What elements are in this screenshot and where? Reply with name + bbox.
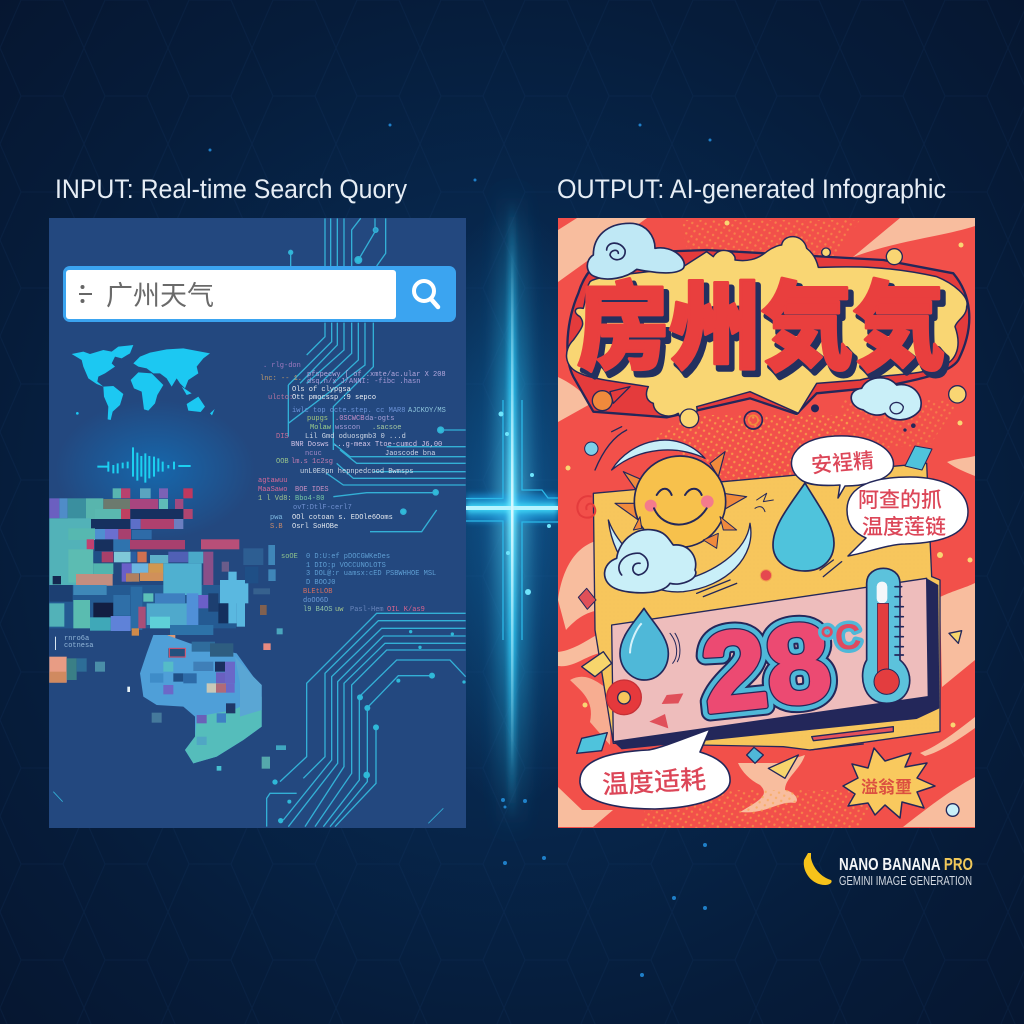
data code text: . rlg-don [263, 362, 301, 370]
speech bubble: top: 安裎精 [810, 449, 875, 478]
large water drop [773, 483, 834, 571]
data code text: .0SCWCB [335, 415, 364, 423]
south pixel landmass [140, 635, 262, 763]
circuit traces lower [53, 613, 466, 827]
speech bubble: main: 阿查的抓 [858, 489, 942, 512]
data code text: agtawuu [258, 477, 287, 485]
data code text: .sacsoe [372, 424, 401, 432]
data code text: S.B [270, 523, 283, 531]
poster sparkles and dots [566, 220, 972, 728]
data code text: soOE [281, 553, 298, 561]
data code text: pwa [270, 514, 283, 522]
heading: input: INPUT: Real-time Search Quory [55, 174, 407, 204]
data code text [64, 362, 446, 650]
blue confetti [905, 446, 932, 470]
data code text: iwlc top octe.step. cc MAR8 [292, 407, 405, 415]
data code text: 0 D:U:ef pDOCGWKeDes [306, 553, 390, 561]
data code text: OOB [276, 458, 289, 466]
speech bubble: top [791, 436, 893, 498]
temperature value: °C [819, 615, 863, 660]
circuit traces upper [288, 218, 466, 532]
icon: magnifier [414, 281, 438, 307]
temperature value: 28 [696, 599, 836, 736]
data code text: pupgs [307, 415, 328, 423]
data code text: ovT:DtlF-cerl7 [293, 504, 352, 512]
panel: input search data [49, 218, 466, 828]
logo subtitle: GEMINI IMAGE GENERATION [839, 874, 972, 888]
sun character [577, 427, 773, 547]
search menu icon [79, 285, 92, 303]
data code text: D BOOJ0 [306, 579, 335, 587]
data code text: BLEtLOB [303, 588, 332, 596]
logo title: NANO BANANA PRO [839, 854, 973, 874]
title text: 房州気気 [577, 275, 945, 382]
temperature value: 28 [696, 599, 836, 736]
data code text: OIL K/as9 [387, 606, 425, 614]
speech bubble: main: 温度莲链 [862, 516, 946, 539]
data code text: rnro6a [64, 635, 89, 643]
data code text: Pasl-Hem [350, 606, 384, 614]
temperature value: 28 [696, 599, 836, 736]
data code text: da-ogts [365, 415, 394, 423]
small water drop [577, 588, 962, 816]
data code text: MaaSawo [258, 486, 287, 494]
data code text: uw [335, 606, 344, 614]
logo: nano banana pro [804, 853, 973, 888]
data code text: DIS [276, 433, 289, 441]
speech bubble: bottom: 温度适耗 [601, 764, 707, 800]
data code text: l9 B4OS [303, 606, 332, 614]
data code text: BOE IDES [295, 486, 329, 494]
data code text: doOO6D [303, 597, 328, 605]
heading: output: OUTPUT: AI-generated Infographic [557, 174, 946, 204]
data code text: wsscon [335, 424, 360, 432]
data code text: BNR Dosws ...g-meax Ttoe-cumcd J6,00 [291, 441, 442, 449]
data code text: cotnesa [64, 642, 93, 650]
data code text: Ols of clypgsa [292, 386, 351, 394]
data code text: Molaw [310, 424, 332, 432]
pixelated glitch map mosaic [49, 488, 286, 771]
clouds near title [587, 223, 921, 420]
data code text: pfspecwy [ of .xmte/ac.ular X 208 [307, 371, 446, 379]
data code text: 3 DOL@:r uamsx:cED PSBWHHOE MSL [306, 570, 436, 578]
data code text: Ott pmocssp :9 sepco [292, 394, 376, 402]
moon and cloud [605, 517, 842, 597]
speech bubble: main [847, 477, 968, 556]
world map [72, 345, 215, 420]
data code text: Bbo4-80 [295, 495, 324, 503]
search query text: 广州天气 [106, 281, 214, 311]
icon: banana [804, 853, 832, 885]
temperature value: 28 [696, 599, 836, 736]
data code text: 1 DIO:p VOCCUNOLOTS [306, 562, 386, 570]
data code text: Osrl SoHOBe [292, 523, 338, 531]
poster halftone dots [640, 220, 960, 828]
poster background stripes [558, 218, 975, 827]
panel: output poster [558, 218, 975, 828]
data code text: Jaoscode bna [385, 450, 435, 458]
data code text: dsq.n/x J/ANNI: -fibc .hasn [307, 378, 420, 386]
data code text: lnc: -- 1. [260, 375, 302, 383]
thermometer [863, 568, 910, 703]
data code text: unL0E8pn hepnpedcood Bwmsps [300, 468, 413, 476]
title burst [567, 237, 969, 432]
title text: 房州気気 [581, 280, 949, 387]
data code text: AJCKOY/MS [408, 407, 446, 415]
pink temperature card [612, 578, 939, 750]
data code text: ulcto: [268, 394, 293, 402]
data code text: OOl cotoan s. EDOle6Ooms [292, 514, 393, 522]
data code text: ncuc [305, 450, 322, 458]
search bar [63, 266, 456, 322]
speech bubble: bottom [580, 729, 730, 809]
starburst badge [843, 748, 935, 818]
yellow card [593, 463, 940, 750]
ring, confetti shapes [607, 680, 641, 715]
data code text: Lil Gmd oduosgmb3 0 ...d [305, 433, 406, 441]
data code text: lm.s 1c2sg [291, 458, 333, 466]
data code text: 1 l Vd8: [258, 495, 292, 503]
voice waveform [97, 447, 191, 483]
moon crescent arcs [612, 440, 705, 470]
central glowing cross connector [466, 180, 558, 840]
starburst badge: 溢翁壐 [861, 778, 912, 797]
